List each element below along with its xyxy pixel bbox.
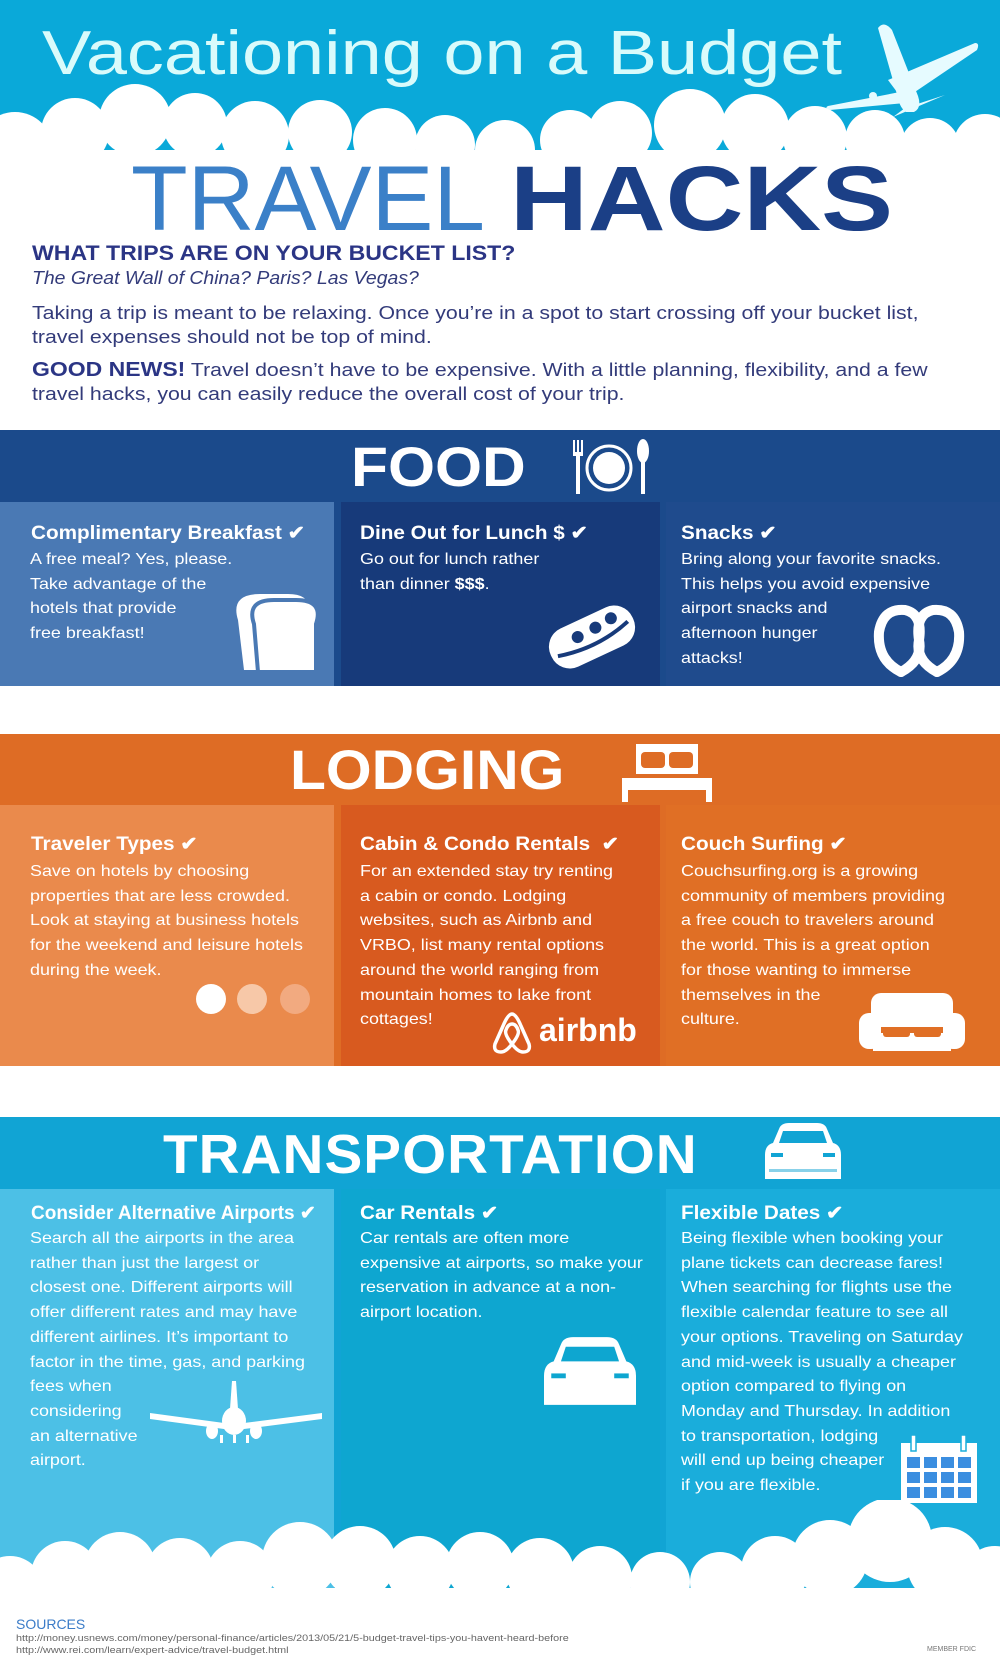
column: Snacks: This helps you avoid expensive (681, 576, 930, 593)
column: Complimentary Breakfast: Complimentary Breakfast ✔ (31, 523, 305, 544)
column: Snacks: airport snacks and (681, 600, 827, 617)
column: Consider Alternative Airports: Consider Alternative Airports ✔ (31, 1203, 316, 1224)
column: Complimentary Breakfast (0, 502, 334, 686)
column: Cabin & Condo Rentals: websites, such as Airbnb and (360, 912, 592, 929)
heading: FOOD: FOOD (351, 435, 526, 498)
column: Cabin & Condo Rentals: VRBO, list many rental options (360, 937, 604, 954)
column: Traveler Types (0, 805, 334, 1066)
column: Couch Surfing: themselves in the (681, 987, 820, 1004)
column: Complimentary Breakfast: A free meal? Yes, please. (30, 551, 232, 568)
paragraph 1: Taking a trip is meant to be relaxing. Once you’re in a spot to start crossing off your bucket list, (32, 302, 919, 323)
paragraph 2: travel hacks, you can easily reduce the overall cost of your trip. (32, 383, 624, 404)
column: Consider Alternative Airports: different airlines. It’s important to (30, 1329, 288, 1346)
column: Flexible Dates: option compared to flying on (681, 1378, 906, 1395)
sources: SOURCES (16, 1616, 85, 1632)
icon: airbnb logo (492, 1012, 637, 1054)
sources: http://money.usnews.com/money/personal-finance/articles/2013/05/21/5-budget-travel-tips-you-havent-heard-before (16, 1633, 569, 1643)
column: Consider Alternative Airports: an alternative (30, 1428, 138, 1445)
icon: calendar (901, 1436, 977, 1503)
column: Flexible Dates: and mid-week is usually a cheaper (681, 1354, 956, 1371)
paragraph 2 (32, 359, 928, 404)
column: Snacks: attacks! (681, 650, 743, 667)
member fdic: MEMBER FDIC (927, 1646, 976, 1653)
column: Flexible Dates: When searching for flights use the (681, 1279, 952, 1296)
icon: plate and cutlery (573, 439, 649, 494)
column: Traveler Types: during the week. (30, 962, 161, 979)
intro text block (32, 242, 928, 404)
column: Consider Alternative Airports: rather than just the largest or (30, 1255, 259, 1272)
column: Cabin & Condo Rentals: cottages! (360, 1011, 433, 1028)
sources: http://www.rei.com/learn/expert-advice/travel-budget.html (16, 1645, 289, 1655)
column: Consider Alternative Airports: considering (30, 1403, 122, 1420)
panel: TRANSPORTATION section (0, 1117, 1000, 1617)
column: Traveler Types: for the weekend and leisure hotels (30, 937, 303, 954)
column: Flexible Dates (666, 1189, 1000, 1617)
column: Snacks: Snacks ✔ (681, 523, 777, 544)
column: Couch Surfing: the world. This is a great option (681, 937, 930, 954)
heading: TRANSPORTATION: TRANSPORTATION (163, 1123, 698, 1185)
icon: bed (622, 744, 712, 802)
column: Traveler Types: Save on hotels by choosing (30, 863, 249, 880)
column: Car Rentals: Car rentals are often more (360, 1230, 569, 1247)
column: Dine Out for Lunch: Go out for lunch rather (360, 551, 539, 568)
icon: airplane front (150, 1381, 322, 1443)
column: Couch Surfing: for those wanting to immerse (681, 962, 911, 979)
column: Traveler Types: properties that are less crowded. (30, 888, 290, 905)
column: Flexible Dates: Flexible Dates ✔ (681, 1203, 843, 1224)
column: Consider Alternative Airports: airport. (30, 1452, 86, 1469)
column: Couch Surfing: Couch Surfing ✔ (681, 834, 847, 855)
icon: bread (236, 594, 316, 670)
column: Dine Out for Lunch: Dine Out for Lunch $ ✔ (360, 523, 588, 544)
column: Complimentary Breakfast: Take advantage of the (30, 576, 206, 593)
paragraph 2: GOOD NEWS! Travel doesn’t have to be expensive. With a little planning, flexibility, and a few (32, 359, 928, 381)
column: Consider Alternative Airports: Search all the airports in the area (30, 1230, 294, 1247)
column: Snacks: afternoon hunger (681, 625, 818, 642)
icon: sub sandwich (548, 606, 636, 668)
column: Complimentary Breakfast: hotels that provide (30, 600, 176, 617)
column: Car Rentals: airport location. (360, 1304, 483, 1321)
column: Consider Alternative Airports: closest one. Different airports will (30, 1279, 293, 1296)
column: Snacks: Bring along your favorite snacks. (681, 551, 941, 568)
icon: car heading (765, 1123, 841, 1179)
icon: airbnb logo: airbnb (539, 1012, 637, 1048)
title: Vacationing on a Budget: Vacationing on a Budget (42, 19, 842, 88)
column: Dine Out for Lunch (341, 502, 660, 686)
column: Snacks (666, 502, 1000, 686)
column: Flexible Dates: will end up being cheaper (681, 1452, 884, 1469)
column: Complimentary Breakfast: free breakfast! (30, 625, 145, 642)
column: Couch Surfing: a free couch to travelers around (681, 912, 934, 929)
column: Flexible Dates: Being flexible when booking your (681, 1230, 943, 1247)
italic line: The Great Wall of China? Paris? Las Vegas? (32, 268, 419, 288)
column: Flexible Dates: if you are flexible. (681, 1477, 820, 1494)
column: Car Rentals (341, 1189, 660, 1617)
paragraph 1: travel expenses should not be top of mind. (32, 326, 432, 347)
column: Consider Alternative Airports: fees when (30, 1378, 112, 1395)
column: Consider Alternative Airports: offer different rates and may have (30, 1304, 297, 1321)
title: TRAVEL HACKS (131, 150, 893, 240)
column: Flexible Dates: to transportation, lodging (681, 1428, 878, 1445)
column: Cabin & Condo Rentals: mountain homes to lake front (360, 987, 591, 1004)
column: Flexible Dates: your options. Traveling on Saturday (681, 1329, 963, 1346)
column: Cabin & Condo Rentals: around the world ranging from (360, 962, 599, 979)
sources (16, 1616, 569, 1655)
column: Flexible Dates: flexible calendar feature to see all (681, 1304, 948, 1321)
column: Dine Out for Lunch: than dinner $$$. (360, 576, 490, 593)
heading: LODGING: LODGING (290, 738, 564, 801)
icon: car (544, 1337, 636, 1405)
column: Couch Surfing (666, 805, 1000, 1066)
column: Cabin & Condo Rentals: a cabin or condo. Lodging (360, 888, 566, 905)
column: Consider Alternative Airports (0, 1189, 334, 1617)
column: Flexible Dates: plane tickets can decrease fares! (681, 1255, 943, 1272)
column: Couch Surfing: Couchsurfing.org is a growing (681, 863, 918, 880)
icon: pretzel (874, 604, 964, 677)
column: Car Rentals: reservation in advance at a non- (360, 1279, 616, 1296)
bucket list heading: WHAT TRIPS ARE ON YOUR BUCKET LIST? (32, 242, 515, 265)
column: Flexible Dates: Monday and Thursday. In addition (681, 1403, 950, 1420)
column: Traveler Types: Look at staying at business hotels (30, 912, 299, 929)
bottom clouds (0, 1500, 1000, 1617)
column: Car Rentals: Car Rentals ✔ (360, 1203, 498, 1224)
column: Consider Alternative Airports: factor in the time, gas, and parking (30, 1354, 305, 1371)
column: Couch Surfing: culture. (681, 1011, 740, 1028)
column: Car Rentals: expensive at airports, so make your (360, 1255, 643, 1272)
panel: LODGING section (0, 734, 1000, 1066)
icon: sofa (859, 993, 965, 1051)
header sky with clouds (0, 0, 1000, 150)
paragraph 1 (32, 302, 919, 347)
icon: three dots (196, 984, 310, 1014)
icon: airplane top (826, 24, 978, 117)
column: Cabin & Condo Rentals: Cabin & Condo Rentals ✔ (360, 834, 619, 855)
column: Couch Surfing: community of members providing (681, 888, 945, 905)
column: Cabin & Condo Rentals: For an extended stay try renting (360, 863, 613, 880)
column: Traveler Types: Traveler Types ✔ (31, 834, 198, 855)
column: Cabin & Condo Rentals (341, 805, 660, 1066)
panel: FOOD section (0, 430, 1000, 686)
